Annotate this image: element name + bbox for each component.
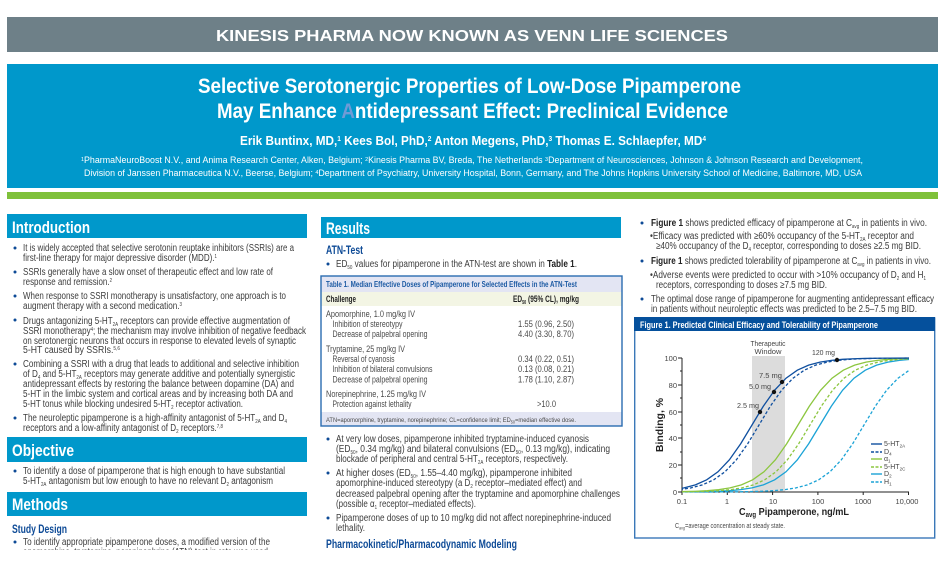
legend: 5-HT: [884, 441, 900, 448]
text block: results bullets: At very low doses, pipamperone inhibited tryptamine-induced cyanosis: [336, 434, 589, 445]
authors: Anton Megens, PhD,: [431, 134, 548, 148]
x axis labels: 1000: [855, 497, 871, 506]
panel: right column text: avg: [852, 224, 859, 230]
text block: introduction bullets: 4: [91, 327, 93, 333]
heading: methods: Methods: [12, 495, 68, 514]
table rows: 1.55 (0.96, 2.50): [518, 319, 574, 329]
text block: introduction bullets: first-line therapy for major depressive disorder (MDD).: [23, 253, 261, 264]
dose labels: 7.5 mg: [759, 371, 782, 380]
text block: results bullets: 50: [516, 450, 521, 456]
text block: introduction bullets: 4: [285, 419, 287, 425]
panel: right column text: and H: [899, 270, 923, 281]
text block: introduction bullets: 3: [180, 302, 182, 308]
panel: right column text: [640, 218, 934, 315]
affiliations: Department of Psychiatry, University Hospital, Bonn, Germany, and The Johns Hopkins University School of Medicine, Baltimore, MD, USA: [318, 168, 862, 178]
legend: 5-HT: [884, 464, 900, 471]
x axis labels: 100: [812, 497, 824, 506]
table rows: 0.13 (0.08, 0.21): [518, 364, 574, 374]
x axis labels: 1: [725, 497, 729, 506]
text block: results bullets: At higher doses (ED: [336, 468, 426, 479]
text block: introduction bullets: receptors can provide effective augmentation of: [118, 316, 290, 327]
text block: introduction bullets: 1: [215, 254, 217, 260]
text block: introduction bullets: of D: [23, 369, 41, 380]
binding curves: [682, 357, 909, 493]
text block: introduction bullets: 5-HT caused by SSRIs.: [23, 345, 127, 356]
text block: results bullets: 2: [470, 484, 473, 490]
dose labels: [737, 348, 835, 410]
title panel: [7, 64, 938, 188]
text block: introduction bullets: on serotonergic neurons that occurs in response to elevated levels of synaptic: [23, 336, 296, 347]
panel: right column text: •Efficacy was predicted with ≥60% occupancy of the 5-HT: [650, 231, 905, 242]
text block: introduction bullets: and D: [261, 413, 285, 424]
text block: results bullets: blockade of peripheral and central 5-HT: [336, 454, 512, 465]
table footnote: ATN=apomorphine, tryptamine, norepinephrine; CL=confidence limit; ED: [326, 417, 544, 424]
text block: introduction bullets: 5-HT tonus while blocking undesired 5-HT: [23, 399, 209, 410]
y axis labels: 60: [669, 408, 677, 417]
text block: introduction bullets: response and remission.: [23, 277, 132, 288]
text block: introduction bullets: 4: [38, 375, 40, 381]
heading: objective: [7, 437, 307, 462]
y axis labels: 0: [673, 488, 677, 497]
table header: Challenge: [326, 294, 356, 304]
text block: results bullets: 1: [375, 505, 377, 511]
text block: introduction bullets: augment therapy with a second medication.: [23, 301, 216, 312]
text block: introduction bullets: [14, 243, 307, 435]
therapeutic window label: Window: [754, 347, 782, 356]
text block: introduction bullets: 2: [171, 405, 174, 411]
table rows: 1.78 (1.10, 2.87): [518, 374, 574, 384]
dose labels: 120 mg: [812, 348, 835, 357]
therapeutic window label: Therapeutic: [750, 339, 786, 348]
text block: results bullets: 2A: [478, 460, 484, 466]
text block: introduction bullets: 5,6: [113, 346, 120, 352]
text block: introduction bullets: antidepressant effects by restoring the balance between dopamine (DA) and: [23, 379, 294, 390]
affiliations: Department of Neurosciences, Johnson & Johnson Research and Development,: [548, 155, 863, 165]
text block: results bullets: [326, 434, 620, 534]
text block: methods bullet: To identify appropriate pipamperone doses, a modified version of the: [23, 537, 270, 548]
text block: objective bullet: antagonism but low enough to have no relevant D: [46, 476, 227, 487]
x axis title: C: [739, 506, 747, 518]
authors: Kees Bol, PhD,: [341, 134, 428, 148]
panel: left column: [7, 214, 307, 558]
text block: results bullets: (ED: [336, 444, 353, 455]
title: [198, 74, 741, 123]
table rows: [326, 309, 574, 409]
text block: objective bullet: antagonism: [229, 476, 273, 487]
legend: H: [884, 479, 889, 486]
table header: 50: [522, 300, 526, 306]
legend: D: [884, 449, 889, 456]
y axis title: Binding, %: [654, 397, 666, 452]
panel: right column text: 4: [748, 247, 751, 253]
heading: methods: [7, 492, 307, 516]
text block: table intro: ED: [336, 259, 350, 270]
heading: results: [321, 217, 621, 238]
table rows: Norepinephrine, 1.25 mg/kg IV: [326, 389, 426, 399]
panel: right column text: 2A: [860, 237, 866, 243]
text block: objective bullet: 5-HT: [23, 476, 45, 487]
panel: right column text: 1: [923, 276, 926, 282]
text block: introduction bullets: 5-HT in the limbic system and cortical areas and by increasing both DA and: [23, 389, 293, 400]
text block: results bullets: , 0.13 mg/kg), indicating: [521, 444, 610, 455]
table rows: Tryptamine, 25 mg/kg IV: [326, 344, 405, 354]
authors: 4: [702, 136, 706, 143]
affiliations: PharmaNeuroBoost N.V., and Anima Research Center, Alken, Belgium;: [84, 155, 365, 165]
dose markers: [758, 358, 839, 414]
text block: objective bullet: To identify a dose of pipamperone that is high enough to have substantial: [23, 466, 285, 477]
table rows: 0.34 (0.22, 0.51): [518, 354, 574, 364]
text block: results bullets: , 1.55–4.40 mg/kg), pipamperone inhibited: [416, 468, 572, 479]
heading: objective: Objective: [12, 441, 74, 460]
text block: introduction bullets: 7,8: [217, 424, 223, 430]
dose labels: 2.5 mg: [737, 401, 759, 410]
table header: (95% CL), mg/kg: [526, 294, 579, 304]
affiliations: 4: [315, 170, 318, 176]
top banner: KINESIS PHARMA NOW KNOWN AS VENN LIFE SCIENCES: [216, 28, 728, 45]
subheading: study design: Study Design: [12, 524, 67, 536]
x axis title: avg: [746, 512, 756, 519]
affiliations: 3: [545, 157, 548, 163]
figure title: Figure 1. Predicted Clinical Efficacy and Tolerability of Pipamperone: [640, 320, 878, 330]
therapeutic window band: [752, 356, 785, 492]
text block: introduction bullets: receptor activation.: [174, 399, 243, 410]
text block: introduction bullets: receptors may generate additive and potentially synergistic: [82, 369, 295, 380]
text block: introduction bullets: SSRI monotherapy: [23, 326, 108, 337]
text block: results bullets: receptors, respectively.: [483, 454, 568, 465]
chart axes: [678, 358, 909, 495]
table rows: Decrease of palpebral opening: [332, 374, 428, 384]
table header: [326, 294, 579, 306]
figure title: [634, 317, 935, 331]
y axis labels: 80: [669, 381, 677, 390]
text block: introduction bullets: Combining a SSRI with a drug that leads to additional and selective inhibition: [23, 359, 299, 370]
text block: introduction bullets: 2: [110, 278, 112, 284]
x axis labels: [677, 497, 918, 506]
x axis labels: 0.1: [677, 497, 687, 506]
legend: D: [884, 471, 889, 478]
table header: ED: [513, 294, 525, 304]
text block: results bullets: Pipamperone doses of up to 10 mg/kg did not affect norepinephrine-induced: [336, 513, 611, 524]
authors: Thomas E. Schlaepfer, MD: [552, 134, 702, 148]
x axis title: Pipamperone, ng/mL: [756, 506, 850, 518]
text block: results bullets: decreased palpebral opening after the tryptamine and apomorphine challenges: [336, 489, 620, 500]
panel: figure 1: [634, 317, 936, 539]
figure footnote: C: [675, 523, 680, 530]
text block: introduction bullets: receptors and a low-affinity antagonist of D: [23, 423, 212, 434]
text block: introduction bullets: 2: [176, 429, 179, 435]
text block: introduction bullets: The neuroleptic pipamperone is a high-affinity antagonist of 5-HT: [23, 413, 310, 424]
text block: introduction bullets: 2A: [113, 322, 118, 328]
authors: Erik Buntinx, MD,: [240, 134, 343, 148]
table title: Table 1. Median Effective Doses of Pipamperone for Selected Effects in the ATN-Test: [326, 280, 577, 289]
panel: results column: [321, 217, 622, 551]
panel: right column text: ≥40% occupancy of the D: [656, 241, 770, 252]
text block: results bullets: receptor–mediated effect) and: [473, 478, 582, 489]
text block: methods bullet: apomorphine, tryptamine, norepinephrine (ATN) test in rats was used: [23, 547, 268, 558]
text block: methods bullet: [14, 538, 270, 550]
text block: table intro: 50: [347, 265, 352, 271]
title: May Enhance Antidepressant Effect: Preclinical Evidence: [217, 99, 728, 123]
heading: results: Results: [326, 219, 370, 238]
heading: introduction: [7, 214, 307, 238]
affiliations: 1: [81, 157, 84, 163]
table rows: Decrease of palpebral opening: [332, 329, 428, 339]
panel: right column text: Figure 1 shows predicted tolerability of pipamperone at C: [651, 256, 899, 267]
table rows: 4.40 (3.30, 8.70): [518, 329, 574, 339]
table rows: Inhibition of bilateral convulsions: [332, 364, 433, 374]
affiliations: Kinesis Pharma BV, Breda, The Netherlands: [368, 155, 545, 165]
subheading: ATN-test: ATN-Test: [326, 245, 363, 257]
text block: results bullets: (possible α: [336, 499, 385, 510]
text block: introduction bullets: It is widely accepted that selective serotonin reuptake inhibitors (SSRIs) are a: [23, 243, 294, 254]
x axis labels: 10,000: [896, 497, 918, 506]
heading: introduction: Introduction: [12, 218, 90, 237]
text block: results bullets: lethality.: [336, 523, 365, 534]
panel: right column text: Figure 1 shows predicted efficacy of pipamperone at C: [651, 218, 888, 229]
legend: 2: [889, 474, 892, 478]
figure footnote: =average concentration at steady state.: [685, 523, 785, 530]
legend: 2C: [900, 466, 906, 472]
table rows: Reversal of cyanosis: [332, 354, 395, 364]
x axis labels: 10: [769, 497, 777, 506]
text block: introduction bullets: When response to SSRI monotherapy is unsatisfactory, one approach is to: [23, 291, 286, 302]
y axis labels: 20: [669, 461, 677, 470]
text block: objective bullet: 2: [227, 482, 229, 488]
affiliations: Division of Janssen Pharmaceutica N.V., Beerse, Belgium;: [84, 168, 317, 178]
table rows: Protection against lethality: [332, 399, 412, 409]
legend: 4: [889, 452, 892, 456]
text block: results bullets: , 0.34 mg/kg) and bilateral convulsions (ED: [356, 444, 516, 455]
y axis labels: 100: [664, 354, 677, 363]
text block: table intro: values for pipamperone in the ATN-test are shown in: [352, 259, 547, 270]
text block: introduction bullets: 2A: [76, 375, 82, 381]
table rows: Inhibition of stereotypy: [332, 319, 403, 329]
text block: table intro: Table 1.: [547, 259, 581, 270]
subheading: pharmacokinetic modeling: Pharmacokinetic/Pharmacodynamic Modeling: [326, 539, 517, 551]
text block: results bullets: 50: [350, 450, 356, 456]
dose labels: 5.0 mg: [749, 382, 771, 391]
y axis labels: [664, 354, 677, 497]
panel: right column text: avg: [857, 262, 864, 268]
text block: introduction bullets: Drugs antagonizing 5-HT: [23, 316, 134, 327]
figure footnote: avg: [679, 526, 685, 530]
y axis labels: 40: [669, 434, 677, 443]
text block: results bullets: receptor–mediated effects).: [377, 499, 476, 510]
table footnote: =median effective dose.: [515, 417, 576, 424]
table rows: Apomorphine, 1.0 mg/kg IV: [326, 309, 415, 319]
legend: [871, 441, 906, 486]
legend: 1: [889, 482, 892, 486]
text block: objective bullet: [14, 466, 285, 488]
text block: introduction bullets: SSRIs generally have a slow onset of therapeutic effect and low rate of: [23, 267, 273, 278]
affiliations: [81, 155, 863, 178]
green divider bar: [7, 192, 938, 199]
text block: objective bullet: 2A: [41, 482, 47, 488]
top banner: [7, 17, 938, 52]
table footnote: 50: [511, 420, 515, 424]
affiliations: 2: [365, 157, 368, 163]
table rows: >10.0: [537, 399, 556, 409]
panel: right column text: 2: [897, 276, 899, 282]
text block: introduction bullets: 2A: [255, 419, 261, 425]
authors: 1: [337, 136, 341, 143]
text block: results bullets: 50: [411, 474, 416, 480]
table 1: [321, 276, 622, 426]
text block: introduction bullets: and 5-HT: [40, 369, 76, 380]
text block: results bullets: apomorphine-induced stereotypy (a D: [336, 478, 503, 489]
panel: right column text: receptor and: [865, 231, 914, 242]
text block: introduction bullets: receptors.: [179, 423, 217, 434]
title: Selective Serotonergic Properties of Low-Dose Pipamperone: [198, 74, 741, 98]
panel: right column text: receptors, corresponding to doses ≥7.5 mg BID.: [656, 280, 827, 291]
authors: 3: [548, 136, 552, 143]
therapeutic window label: [750, 339, 786, 356]
text block: introduction bullets: ; the mechanism may involve inhibition of negative feedback: [93, 326, 307, 337]
legend: 1: [888, 458, 891, 464]
legend: 2A: [900, 444, 905, 448]
legend: α: [884, 456, 888, 463]
authors: 2: [428, 136, 432, 143]
